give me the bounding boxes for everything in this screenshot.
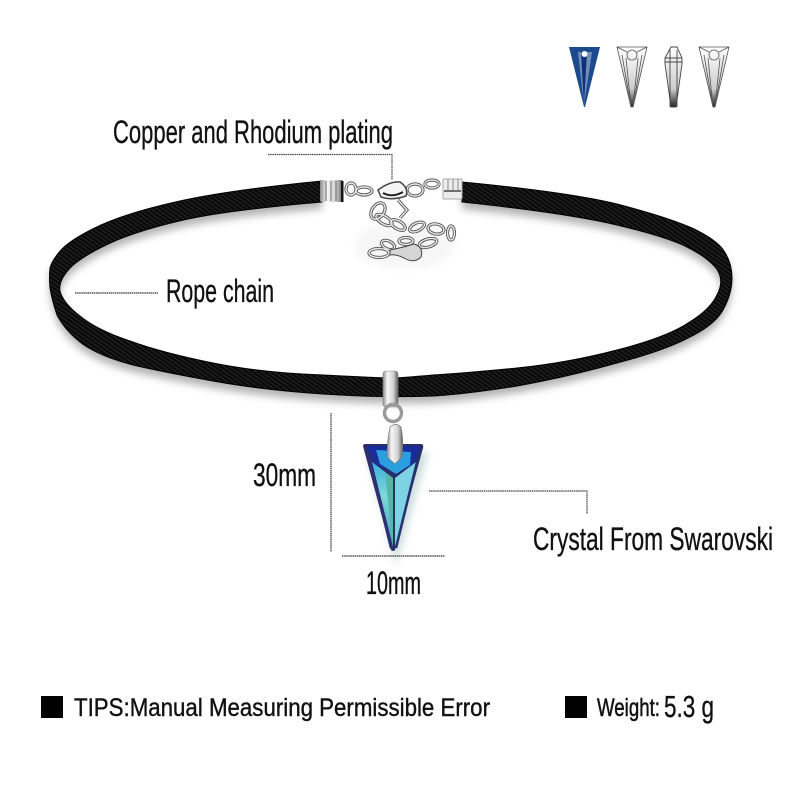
tips bullet [41, 696, 63, 718]
pendant [363, 371, 428, 566]
weight bullet [565, 696, 587, 718]
rope chain band [50, 181, 732, 397]
crystal [363, 444, 423, 551]
tips row [41, 694, 490, 722]
leader: copper [268, 154, 392, 180]
clasp assembly [320, 179, 462, 269]
leader: rope chain [75, 292, 158, 294]
necklace band shadow [50, 188, 732, 404]
weight label: Weight: [597, 694, 660, 722]
dimension line: height [330, 413, 332, 552]
weight row [565, 689, 714, 724]
icon: crystal outline back [699, 47, 729, 107]
tips text: TIPS:Manual Measuring Permissible Error [74, 694, 490, 722]
label: 10mm: 10mm [366, 565, 421, 601]
label: rope chain: Rope chain [166, 273, 274, 309]
label: copper and rhodium plating: Copper and Rhodium plating [113, 114, 393, 150]
icon: crystal outline side [665, 47, 682, 107]
crystal cap [387, 424, 403, 464]
bail [383, 371, 398, 407]
icon: blue crystal [569, 47, 600, 107]
left end cap [320, 180, 344, 202]
ring [384, 404, 402, 422]
chain links [346, 180, 454, 258]
weight value: 5.3 g [664, 689, 714, 724]
right end cap [443, 179, 462, 199]
drop end [390, 244, 422, 261]
leader: crystal [429, 491, 587, 514]
lobster clasp [378, 182, 407, 199]
clasp shadow [355, 221, 455, 269]
icon: crystal outline front [617, 47, 647, 107]
dimension line: width [342, 555, 445, 557]
label: 30mm: 30mm [253, 457, 316, 493]
pendant shadow [366, 452, 428, 566]
top crystal icons [569, 47, 729, 107]
